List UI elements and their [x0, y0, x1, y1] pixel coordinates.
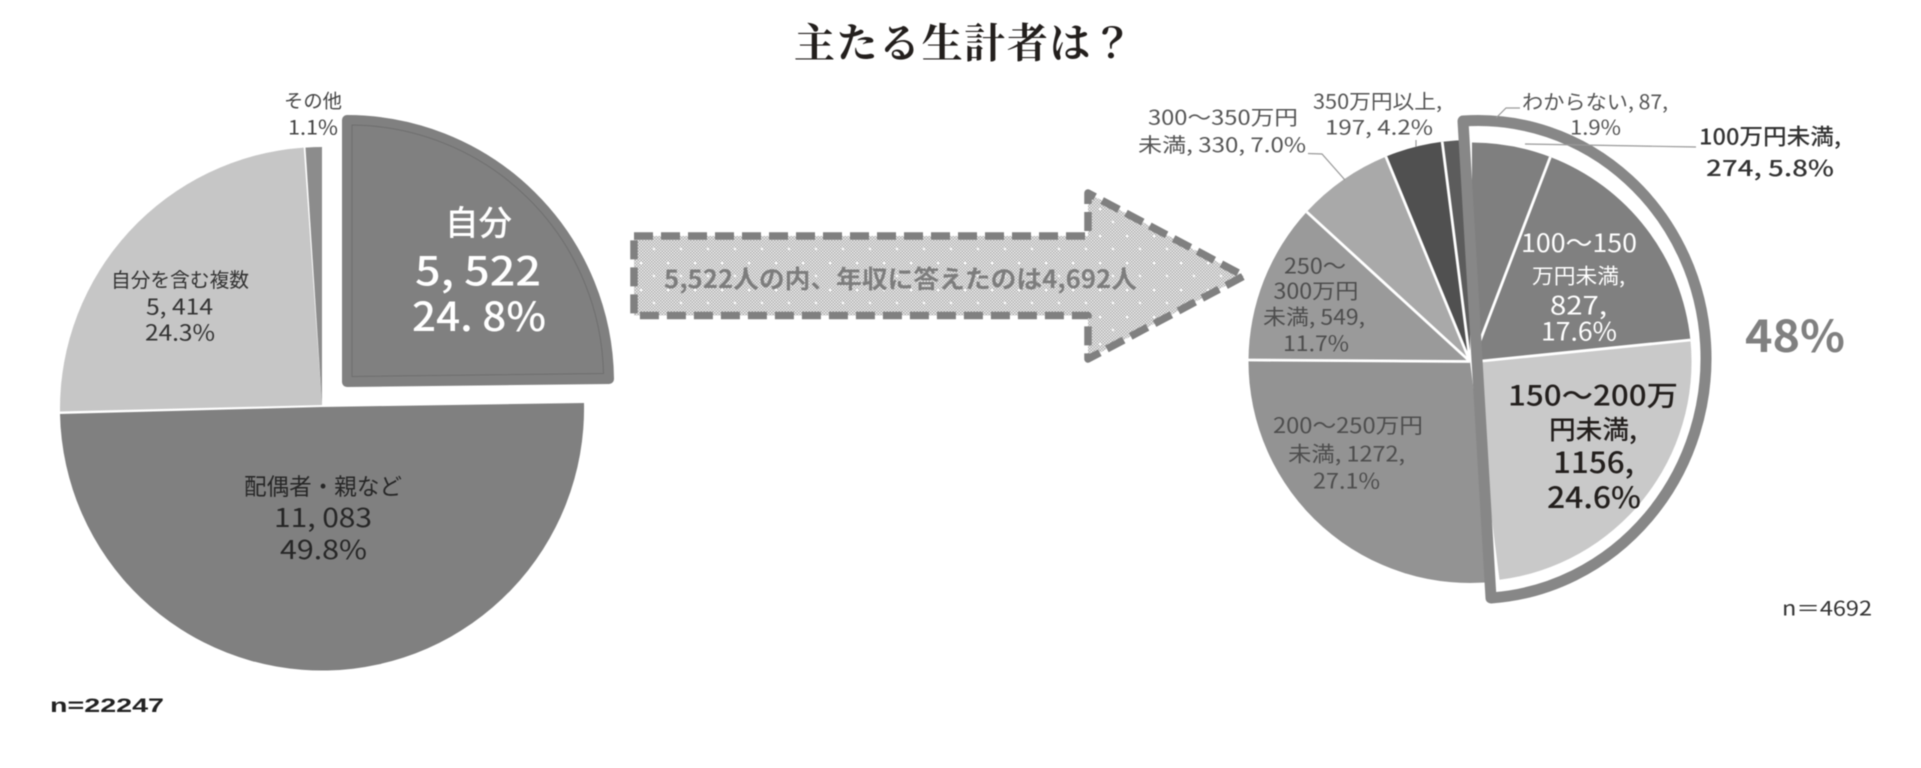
callout: 48 percent: 48% [1745, 301, 1845, 365]
label: under 100 [1699, 120, 1841, 183]
label: 250-300 [1263, 250, 1365, 358]
label: under 100: 100万円未満, [1699, 120, 1841, 152]
slice: unknown [1442, 140, 1470, 362]
slice: spouse or parent [60, 403, 584, 671]
arrow with note [634, 193, 1244, 359]
label: 200-250: 200～250万円 [1273, 410, 1423, 440]
slice: 150-200 [1472, 340, 1692, 580]
arrow shape [634, 193, 1244, 359]
label: multiple including self: 24.3% [145, 316, 215, 348]
sample size, right: n＝4692 [1782, 592, 1872, 622]
label: 200-250 [1273, 410, 1423, 496]
label: unknown: わからない, 87, [1522, 86, 1668, 115]
label: multiple including self: 5, 414 [146, 290, 213, 322]
slice separators [1248, 142, 1470, 362]
title: 主たる生計者は？ [794, 10, 1133, 70]
label: unknown [1522, 86, 1668, 140]
label: 150-200: 1156, [1553, 440, 1634, 482]
label: 250-300: 未満, 549, [1263, 302, 1365, 332]
label: 100-150: 17.6% [1541, 312, 1617, 348]
label: 250-300: 11.7% [1283, 328, 1349, 358]
label: spouse or parent: 11, 083 [274, 498, 372, 535]
label: 200-250: 未満, 1272, [1288, 438, 1405, 468]
label: self: 24. 8% [412, 285, 546, 343]
label: 250-300: 250～ [1284, 250, 1346, 280]
label: 350 and above: 350万円以上, [1313, 86, 1442, 114]
label: 300-350 [1138, 102, 1306, 158]
label: multiple including self [111, 264, 249, 348]
label: 150-200: 円未満, [1549, 410, 1637, 447]
slice: 100-150 [1472, 157, 1690, 362]
leader lines [1308, 108, 1696, 180]
chart: left pie of main earner [50, 86, 609, 717]
slice: self, exploded with outline [347, 120, 609, 382]
sample size, left: n=22247 [50, 696, 164, 717]
label: spouse or parent: 49.8% [280, 530, 367, 567]
label: 300-350: 未満, 330, 7.0% [1138, 129, 1306, 158]
slice: multiple including self [60, 148, 322, 412]
slice: 350 and above [1386, 142, 1470, 362]
label: 100-150: 827, [1550, 286, 1607, 322]
highlight frame background [1463, 120, 1706, 598]
arrow note text: 5,522人の内、年収に答えたのは4,692人 [664, 260, 1137, 296]
label: 100-150: 万円未満, [1532, 260, 1625, 290]
label: 100-150: 100～150 [1521, 224, 1637, 260]
slice: 200-250 [1248, 360, 1498, 583]
label: 150-200: 150～200万 [1508, 374, 1678, 414]
slice: under 100 [1472, 142, 1550, 362]
label: self: 自分 [445, 196, 512, 245]
label: spouse or parent [244, 468, 402, 567]
label: under 100: 274, 5.8% [1706, 151, 1834, 183]
label: multiple including self: 自分を含む複数 [111, 264, 249, 293]
label: 300-350: 300～350万円 [1148, 102, 1298, 130]
slice: other [306, 147, 322, 405]
label: self [412, 196, 546, 343]
label: spouse or parent: 配偶者・親など [244, 468, 402, 502]
label: unknown: 1.9% [1570, 112, 1621, 140]
label: 350 and above [1313, 86, 1442, 140]
label: 150-200 [1508, 374, 1678, 517]
slice: 300-350 [1307, 157, 1470, 362]
label: 100-150 [1521, 224, 1637, 348]
group separators [1472, 157, 1690, 362]
highlight frame [1463, 120, 1706, 598]
label: other: その他 [284, 86, 342, 114]
label: self: 5, 522 [415, 240, 541, 298]
label: other: 1.1% [288, 112, 338, 140]
slice: 250-300 [1248, 212, 1470, 362]
label: 250-300: 300万円 [1274, 276, 1358, 306]
chart: right pie of annual income [1138, 86, 1872, 622]
label: 200-250: 27.1% [1313, 466, 1380, 496]
label: 350 and above: 197, 4.2% [1325, 112, 1433, 140]
label: 150-200: 24.6% [1547, 475, 1641, 517]
label: other [284, 86, 342, 140]
